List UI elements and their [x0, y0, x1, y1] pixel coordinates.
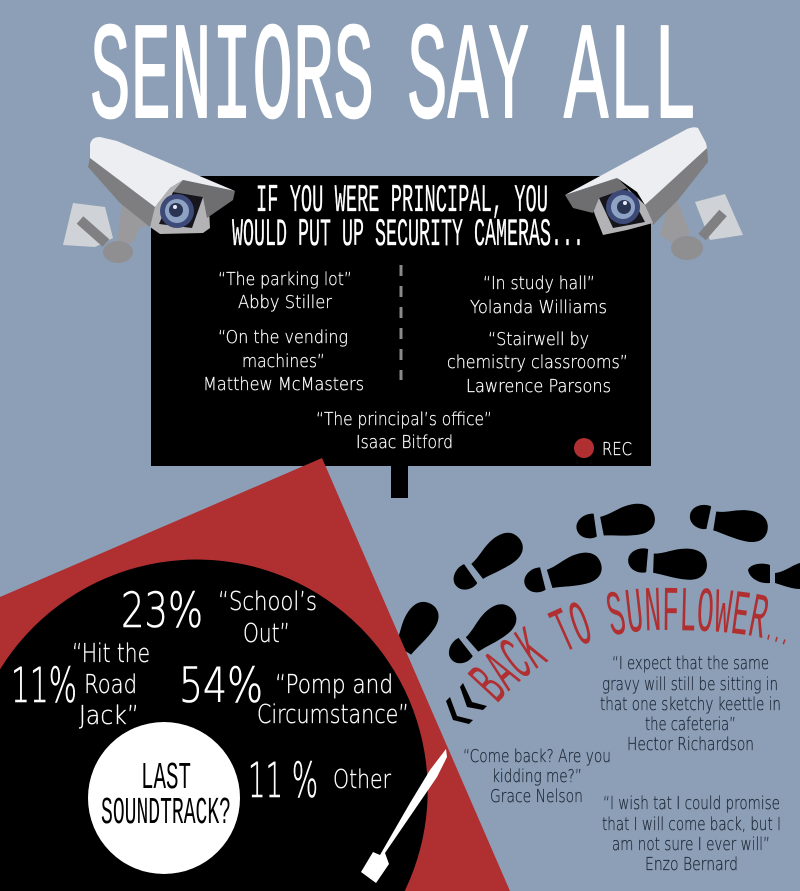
quotes: right column: “Stairwell by [488, 329, 589, 350]
quote: centre: Isaac Bitford [356, 432, 453, 453]
stat: Hit the Road Jack 11%: “Hit the [72, 639, 150, 669]
quotes: right column: “In study hall” [483, 273, 595, 294]
stat: Pomp and Circumstance 54%: “Pomp and [275, 670, 393, 700]
stat: School's Out 23%: Out” [243, 619, 290, 649]
stat: Other 11%: 11 % [248, 753, 318, 809]
quote: centre [316, 409, 492, 453]
quotes: right column: Lawrence Parsons [466, 376, 611, 397]
quote: Hector Richardson: Hector Richardson [627, 734, 754, 755]
quote: Grace Nelson [463, 746, 611, 807]
stat: Pomp and Circumstance 54%: Circumstance” [257, 700, 409, 730]
panel: black vinyl record [0, 560, 428, 891]
heading: back to Sunflower: BACK TO SUNFLOWER [468, 588, 768, 702]
icon: chevrons [446, 683, 487, 724]
record label: last soundtrack: SOUNDTRACK? [101, 792, 231, 835]
quote: Enzo Bernard: Enzo Bernard [645, 854, 738, 875]
record label: last soundtrack [88, 722, 240, 874]
rec indicator [574, 438, 632, 460]
quotes: right column: chemistry classrooms” [447, 352, 628, 373]
quote: centre: “The principal’s office” [316, 409, 492, 430]
stat: Other 11%: Other [333, 765, 391, 795]
stat: School's Out 23%: 23% [121, 583, 203, 639]
stat: Hit the Road Jack 11%: 11% [11, 658, 77, 714]
icon: footprints trail [441, 499, 800, 671]
quote: Grace Nelson: Grace Nelson [490, 786, 583, 807]
quotes: right column [447, 273, 628, 397]
title: SAY [407, 3, 529, 159]
heading: security cameras question [232, 179, 584, 257]
stat: Hit the Road Jack 11%: Jack” [79, 701, 139, 731]
title: SENIORS [90, 3, 374, 159]
icon: left security camera [63, 137, 235, 263]
icon: footprint partly behind the turntable [388, 596, 445, 658]
stat: Pomp and Circumstance 54% [179, 658, 409, 730]
panel: billboard [151, 176, 651, 498]
quotes: left column: Abby Stiller [238, 292, 333, 313]
quote: Enzo Bernard [602, 793, 781, 875]
stat: School's Out 23%: “School’s [218, 587, 317, 617]
stat: Hit the Road Jack 11%: Road [84, 670, 137, 700]
quotes: right column: Yolanda Williams [470, 297, 607, 318]
stat: School's Out 23% [121, 583, 317, 649]
quote: Hector Richardson: the cafeteria” [645, 714, 736, 735]
rec indicator: REC [602, 439, 632, 460]
quotes: left column: “On the vending [218, 327, 348, 348]
quotes: left column: “The parking lot” [218, 269, 352, 290]
stat: Hit the Road Jack 11% [11, 639, 150, 731]
icon: right security camera [565, 127, 743, 260]
panel: red turntable base [0, 458, 510, 891]
quotes: left column: Matthew McMasters [203, 374, 364, 395]
quote: Hector Richardson [600, 653, 781, 755]
quotes: left column: machines” [242, 351, 325, 372]
quote: Grace Nelson: kidding me?” [492, 766, 582, 787]
quote: Grace Nelson: “Come back? Are you [463, 746, 611, 767]
record label: last soundtrack: LAST [141, 757, 191, 800]
icon: tonearm [361, 749, 447, 883]
stat: Pomp and Circumstance 54%: 54% [179, 658, 263, 714]
quotes: left column [203, 269, 364, 395]
